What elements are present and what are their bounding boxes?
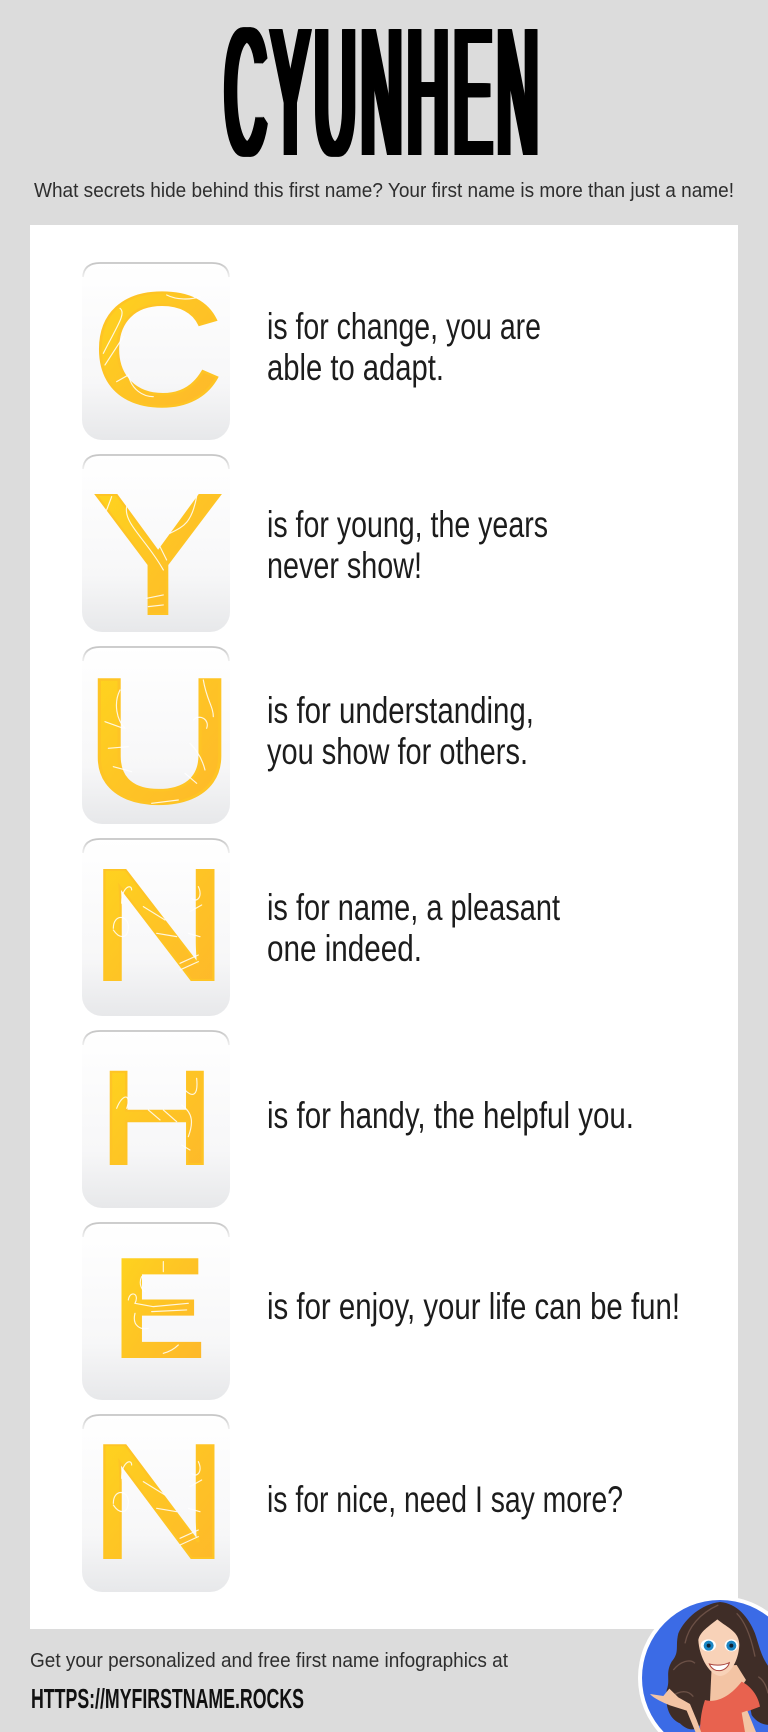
text: N second: is for nice, need I say more? <box>267 1479 623 1520</box>
footer url: HTTPS://MYFIRSTNAME.ROCKS <box>31 1683 304 1714</box>
panel: letters: never show! <box>267 545 422 586</box>
tile: U: U <box>83 642 236 840</box>
tile: H <box>82 1030 230 1208</box>
text: N: is for name, a pleasant <box>267 887 561 928</box>
panel: letters <box>30 225 738 1629</box>
tile: E: E <box>112 1228 207 1389</box>
left arm and hand <box>650 1689 702 1732</box>
tile: N second: N <box>88 1411 229 1594</box>
hair highlights <box>672 1605 768 1697</box>
hair <box>666 1602 768 1729</box>
right arm <box>742 1711 756 1732</box>
tile: H: H <box>98 1042 216 1193</box>
panel: letters: one indeed. <box>267 928 422 969</box>
panel: letters: able to adapt. <box>267 347 444 388</box>
icon: avatar <box>638 1596 768 1732</box>
subtitle: What secrets hide behind this first name? Your first name is more than just a name! <box>34 180 734 202</box>
text: Y: is for young, the years <box>267 504 548 545</box>
footer text: Get your personalized and free first name infographics at <box>30 1650 508 1672</box>
tile: C: C <box>91 259 224 439</box>
panel: letters: you show for others. <box>267 731 528 772</box>
mouth <box>709 1663 729 1671</box>
eye left <box>701 1639 716 1651</box>
text: U: is for understanding, <box>267 690 534 731</box>
eye right <box>725 1639 738 1651</box>
tile: N: N <box>88 836 229 1014</box>
text: H: is for handy, the helpful you. <box>267 1095 634 1136</box>
text: C: is for change, you are <box>267 306 541 347</box>
face <box>698 1619 739 1676</box>
tile: E <box>82 1222 230 1400</box>
top <box>700 1682 760 1732</box>
tile: Y: Y <box>92 459 224 651</box>
neck <box>710 1665 746 1702</box>
